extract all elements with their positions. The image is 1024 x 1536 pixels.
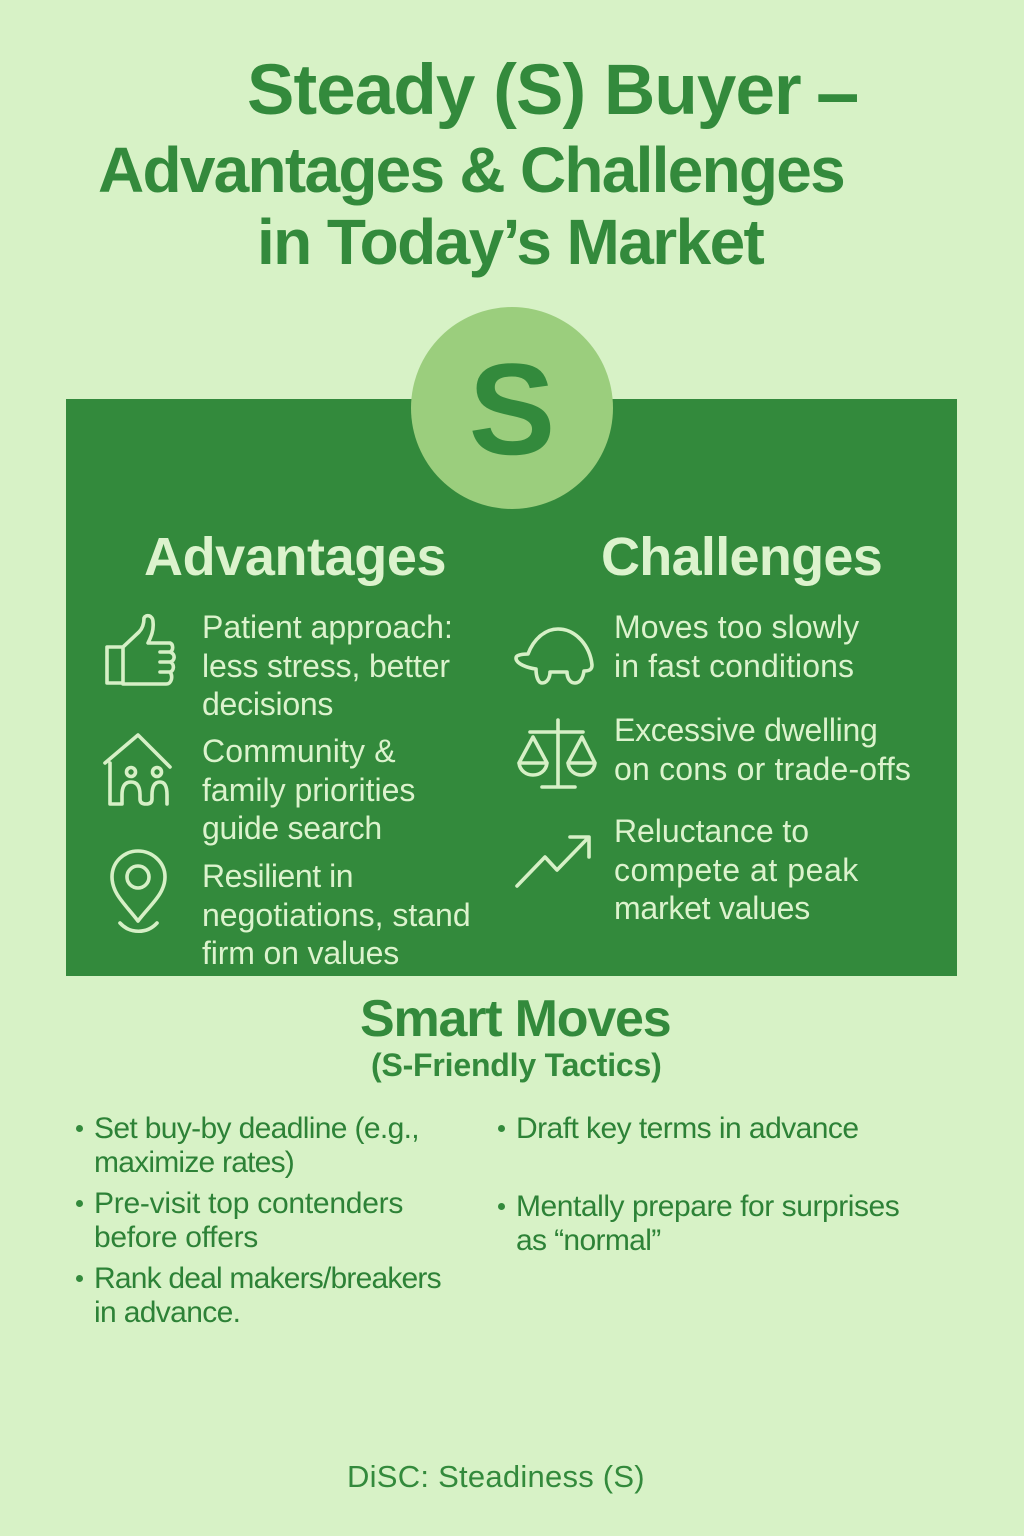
- text: resilient: Resilient in: [202, 858, 353, 894]
- text: reluctance: market values: [614, 890, 810, 926]
- tactic: buy-by deadline: maximize rates): [94, 1146, 294, 1179]
- tactic: pre-visit: [76, 1187, 403, 1254]
- title: Advantages & Challenges: [98, 134, 844, 206]
- icon: house with family: [103, 733, 172, 806]
- icon: rising arrow: [515, 835, 591, 888]
- text: community: [202, 733, 415, 846]
- text: resilient: negotiations, stand: [202, 896, 471, 932]
- tactic: pre-visit: before offers: [94, 1221, 258, 1254]
- icon: scales: [517, 718, 597, 789]
- tactic: draft key terms: Draft key terms in advance: [516, 1112, 859, 1145]
- text: excessive dwelling: on cons or trade-offs: [614, 750, 911, 786]
- text: moves too slowly: Moves too slowly: [614, 609, 859, 645]
- icon: turtle: [514, 627, 594, 685]
- title: –: [816, 48, 859, 136]
- tactic: buy-by deadline: [76, 1112, 419, 1179]
- panel: advantages and challenges: [66, 399, 957, 976]
- text: community: Community &: [202, 733, 396, 769]
- heading: smart moves: Smart Moves: [360, 990, 670, 1048]
- text: excessive dwelling: [614, 712, 911, 786]
- text: resilient: firm on values: [202, 935, 399, 971]
- title: [98, 48, 859, 278]
- text: patient approach: less stress, better: [202, 648, 450, 684]
- badge: S: S: [469, 336, 555, 482]
- title: in Today’s Market: [257, 206, 763, 278]
- text: community: family priorities: [202, 772, 415, 808]
- tactic: rank deal makers: Rank deal makers/breakers: [94, 1262, 441, 1295]
- tactic: buy-by deadline: Set buy-by deadline (e.g.,: [94, 1112, 419, 1145]
- footer: DiSC: Steadiness (S): [347, 1459, 645, 1494]
- tactic: prepare for surprises: as “normal”: [516, 1224, 661, 1257]
- text: excessive dwelling: Excessive dwelling: [614, 712, 878, 748]
- tactic: rank deal makers: [76, 1262, 441, 1329]
- subheading: s-friendly tactics: (S-Friendly Tactics): [371, 1047, 662, 1083]
- text: patient approach: [202, 609, 453, 722]
- text: reluctance: compete at peak: [614, 852, 859, 888]
- text: reluctance: Reluctance to: [614, 813, 809, 849]
- tactic: rank deal makers: in advance.: [94, 1296, 240, 1329]
- tactic: prepare for surprises: Mentally prepare for surprises: [516, 1190, 899, 1223]
- text: resilient: [202, 858, 471, 971]
- text: patient approach: Patient approach:: [202, 609, 453, 645]
- title: Steady (S) Buyer: [247, 51, 801, 130]
- heading: advantages: Advantages: [144, 527, 446, 587]
- tactic: prepare for surprises: [498, 1190, 899, 1257]
- tactic: pre-visit: Pre-visit top contenders: [94, 1187, 403, 1220]
- text: moves too slowly: [614, 609, 859, 684]
- text: reluctance: [614, 813, 859, 926]
- icon: location pin: [110, 849, 167, 933]
- icon: thumbs up: [105, 614, 176, 686]
- text: community: guide search: [202, 810, 382, 846]
- text: moves too slowly: in fast conditions: [614, 648, 854, 684]
- heading: challenges: Challenges: [601, 527, 882, 587]
- badge: S: [411, 307, 613, 509]
- text: patient approach: decisions: [202, 686, 333, 722]
